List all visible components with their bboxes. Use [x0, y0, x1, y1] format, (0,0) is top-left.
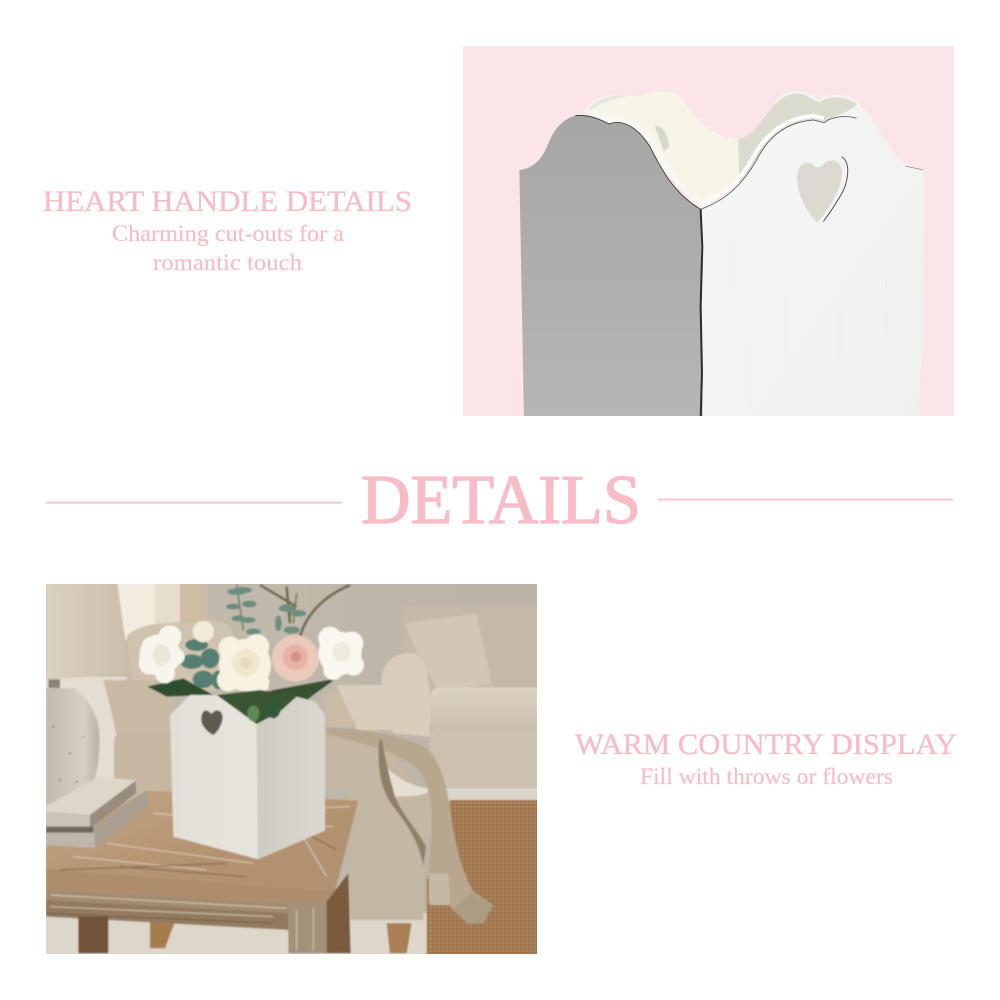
- title: details: DETAILS: [361, 462, 641, 539]
- lamp: [46, 583, 130, 801]
- heading: warm country display: WARM COUNTRY DISPLAY: [575, 728, 957, 761]
- white peony left: [139, 625, 185, 683]
- white peony right: [318, 627, 364, 680]
- heading: heart handle details: HEART HANDLE DETAILS: [43, 185, 412, 218]
- rug: [427, 800, 543, 960]
- floor: [46, 913, 428, 954]
- interior back walls: [583, 91, 740, 209]
- text block: heart handle description: romantic touch: [153, 250, 303, 275]
- armchair: [103, 620, 433, 953]
- flower bouquet: [138, 620, 365, 710]
- background plant: [260, 585, 350, 637]
- icon: heart cut-out: [797, 157, 848, 223]
- right title rule: [658, 499, 953, 501]
- text block: warm country description: Fill with throws or flowers: [640, 764, 893, 789]
- left title rule: [46, 502, 342, 504]
- eucalyptus sprigs: [226, 585, 306, 635]
- white heart box: [170, 690, 325, 859]
- room backdrop: [46, 584, 537, 914]
- text block: heart handle description: [112, 221, 344, 275]
- text block: heart handle description: Charming cut-outs for a: [112, 221, 344, 246]
- sofa: [382, 606, 543, 788]
- pink rose: [272, 635, 319, 682]
- left face: [519, 115, 703, 420]
- right face: [701, 103, 923, 420]
- throw: [327, 728, 493, 924]
- corner seam: [701, 209, 702, 420]
- books: [46, 777, 149, 848]
- distress marks: [733, 240, 734, 286]
- coffee table: [46, 791, 358, 953]
- heart hole: [201, 710, 223, 735]
- panel: product close-up on pink: [463, 46, 954, 420]
- panel: living room photo: [40, 580, 543, 960]
- cream peony centre: [217, 634, 271, 696]
